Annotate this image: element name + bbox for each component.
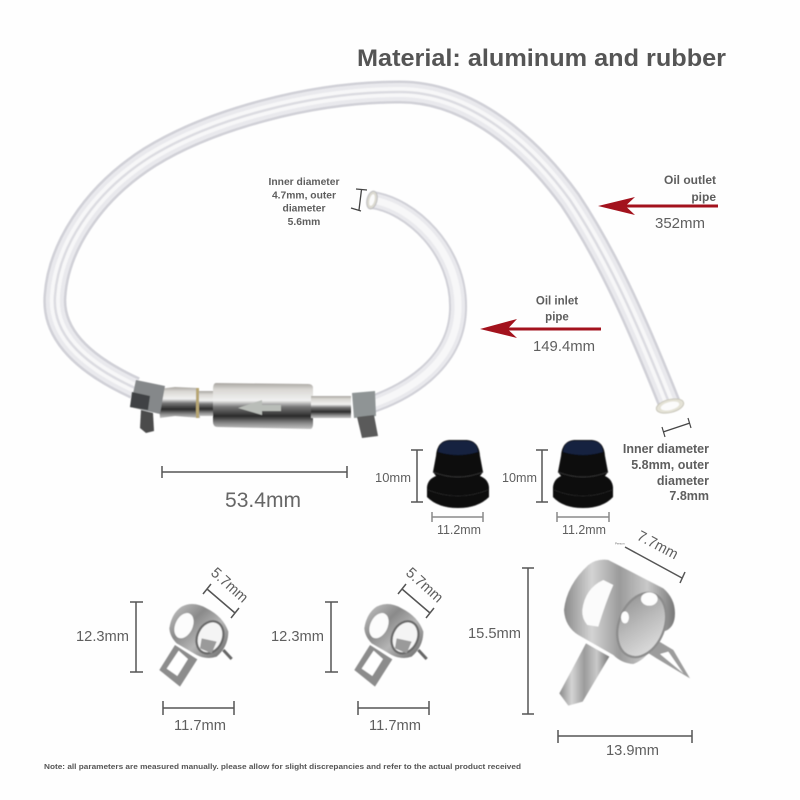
right stem <box>311 396 351 418</box>
callout: oil outlet pipe: 352mm <box>655 215 705 232</box>
dimension: 53.4mm <box>162 466 347 512</box>
arrow: outlet <box>598 197 718 215</box>
plug right dimensions <box>502 450 609 537</box>
small clamp 2 dimensions <box>271 564 446 734</box>
dimension: 53.4mm: 53.4mm <box>225 489 301 512</box>
plug right dimensions: 10mm <box>502 470 537 485</box>
callout: long tube diameter: 5.8mm, outer <box>631 458 709 472</box>
left clamp <box>130 380 165 414</box>
small clamp 2 dimensions: 12.3mm <box>271 628 324 645</box>
large clamp dimensions: Person <box>615 542 625 546</box>
callout: long tube diameter: Inner diameter <box>623 442 709 456</box>
footnote: Note: all parameters are measured manually. please allow for slight discrepancies and refer to the actual product received <box>44 762 521 771</box>
left clamp dark edge <box>130 392 150 410</box>
fuel filter assembly <box>130 380 378 438</box>
plug left dimensions <box>375 450 483 537</box>
small clamp 1 dimensions: 11.7mm <box>174 717 226 734</box>
callout: oil outlet pipe: Oil outlet <box>664 173 716 187</box>
right clamp tab <box>357 415 378 438</box>
callout: short tube diameter <box>269 177 367 228</box>
callout: oil inlet pipe: pipe <box>545 312 569 324</box>
callout: short tube diameter: 4.7mm, outer <box>272 190 336 202</box>
large clamp dimensions: 13.9mm <box>606 742 659 759</box>
large clamp dimensions: 7.7mm <box>634 528 681 563</box>
flow arrow <box>238 400 281 415</box>
left clamp tab <box>140 410 154 433</box>
left ferrule <box>158 387 200 418</box>
small clamp 1 <box>159 604 232 687</box>
plug left dimensions: 11.2mm <box>437 522 481 537</box>
callout: short tube diameter: 5.6mm <box>288 217 320 228</box>
small clamp 1 dimensions <box>76 564 251 734</box>
callout: oil inlet pipe: Oil inlet <box>536 296 578 308</box>
rubber plug right <box>553 440 613 508</box>
callout: short tube diameter: Inner diameter <box>269 177 339 188</box>
large clamp dimensions <box>468 528 692 759</box>
rubber plug left <box>427 440 489 508</box>
small clamp 2 dimensions: 5.7mm <box>402 564 446 606</box>
small clamp 1 dimensions: 12.3mm <box>76 628 129 645</box>
filter body <box>213 383 313 429</box>
small clamp 2 dimensions: 11.7mm <box>369 717 421 734</box>
callout: oil inlet pipe: 149.4mm <box>533 338 595 355</box>
right clamp <box>352 391 376 418</box>
title: Material: aluminum and rubber <box>357 45 726 72</box>
long oil outlet tube <box>55 92 685 416</box>
left stem <box>198 391 216 416</box>
small clamp 1 dimensions: 5.7mm <box>207 564 251 606</box>
plug right dimensions: 11.2mm <box>562 522 606 537</box>
arrow: inlet <box>480 319 601 338</box>
short oil inlet tube <box>360 190 458 408</box>
callout: oil outlet pipe <box>598 173 718 232</box>
callout: long tube diameter: 7.8mm <box>669 489 709 503</box>
callout: oil outlet pipe: pipe <box>691 190 716 204</box>
callout: short tube diameter: diameter <box>283 204 325 214</box>
small clamp 2 <box>354 604 427 687</box>
large clamp dimensions: 15.5mm <box>468 625 521 642</box>
large clamp <box>559 560 690 706</box>
callout: oil inlet pipe <box>480 296 601 355</box>
brass ring <box>196 388 199 418</box>
plug left dimensions: 10mm <box>375 470 411 485</box>
callout: long tube diameter: diameter <box>657 474 709 488</box>
callout: long tube diameter <box>623 418 709 503</box>
